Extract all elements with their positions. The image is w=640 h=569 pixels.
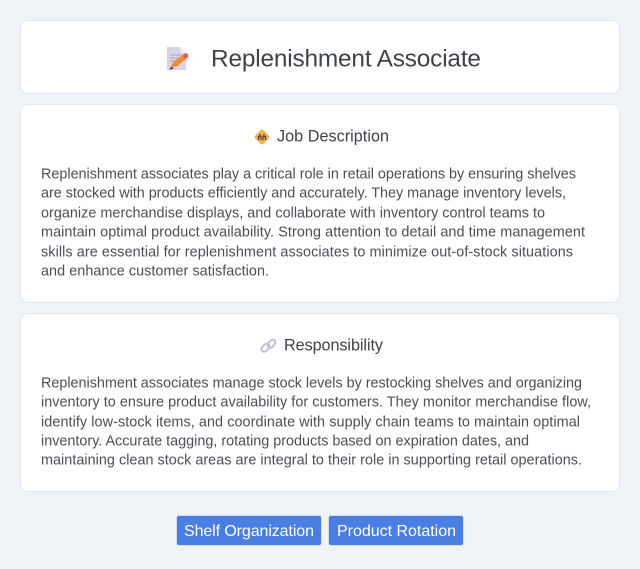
text block: responsibility: inventory. Accurate tagging, rotating products based on expiration dates, and bbox=[41, 434, 529, 450]
text block: job description: Replenishment associates play a critical role in retail operations by ensuring shelves bbox=[41, 166, 576, 182]
text block: responsibility: Replenishment associates manage stock levels by restocking shelves and organizing bbox=[41, 376, 582, 392]
heading: job description: Job Description bbox=[277, 128, 389, 146]
tag: shelf organization bbox=[176, 515, 322, 546]
text block: job description: organize merchandise displays, and collaborate with inventory control teams to bbox=[41, 206, 545, 222]
icon: diamond road sign bbox=[254, 130, 270, 144]
text block: job description: skills are essential for replenishment associates to minimize out-of-stock situations bbox=[41, 244, 573, 260]
text block: responsibility: identify low-stock items, and coordinate with supply chain teams to maintain optimal bbox=[41, 414, 580, 430]
tag: shelf organization: Shelf Organization bbox=[184, 523, 314, 540]
tag: product rotation bbox=[328, 515, 464, 546]
text block: job description: maintain optimal product availability. Strong attention to detail and time management bbox=[41, 224, 585, 240]
icon: chain link bbox=[260, 338, 276, 353]
panel: responsibility bbox=[20, 313, 620, 492]
tag: product rotation: Product Rotation bbox=[337, 523, 456, 540]
text block: job description bbox=[41, 166, 585, 280]
text block: responsibility: inventory to ensure product availability for customers. They monitor merchandise flow, bbox=[41, 394, 591, 410]
text block: responsibility bbox=[41, 376, 591, 468]
title: Replenishment Associate bbox=[211, 46, 481, 72]
heading: responsibility: Responsibility bbox=[284, 336, 384, 354]
text block: job description: and enhance customer satisfaction. bbox=[41, 264, 269, 280]
panel: job description bbox=[20, 104, 620, 303]
text block: job description: are stocked with products efficiently and accurately. They manage inventory levels, bbox=[41, 186, 566, 202]
panel: title card bbox=[20, 20, 620, 94]
icon: document with pencil bbox=[167, 47, 188, 70]
text block: responsibility: maintaining clean stock areas are integral to their role in supporting retail operations. bbox=[41, 452, 582, 468]
